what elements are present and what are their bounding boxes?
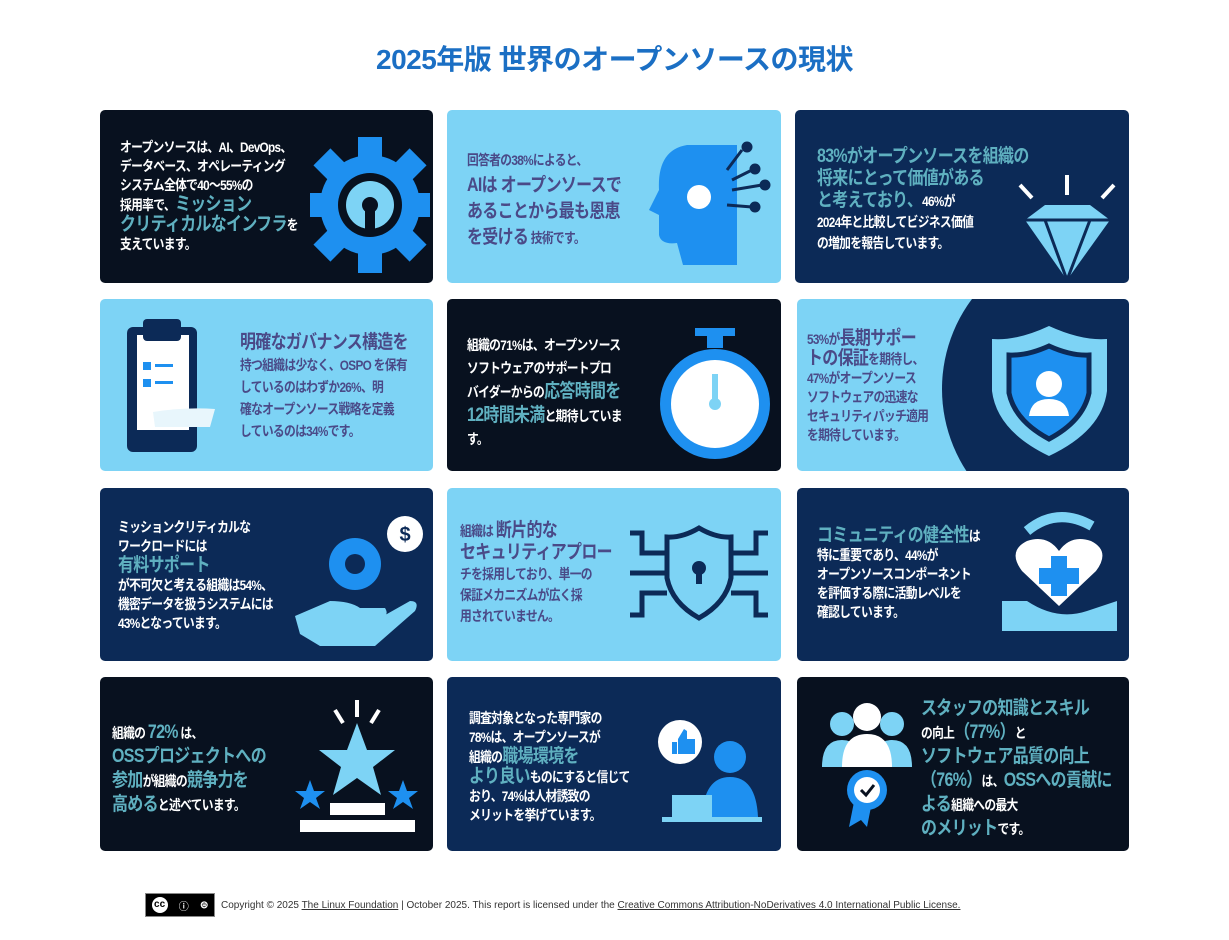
icon: shield (992, 326, 1107, 456)
text block: 組織の71%は、オープンソース (467, 337, 620, 353)
text block (240, 332, 408, 439)
icon: shield circuit (630, 525, 768, 621)
icon: diamond (1018, 175, 1116, 276)
icon: gear (310, 137, 430, 273)
text block: を評価する際に活動レベルを (817, 585, 961, 601)
icon: people with badge (822, 703, 912, 827)
text block: 53%が長期サポー (807, 328, 916, 349)
text block (460, 520, 612, 624)
text block: 特に重要であり、44%が (817, 547, 938, 563)
text block: 参加が組織の競争力を (112, 770, 248, 791)
text block: より良いものにすると信じて (469, 766, 630, 787)
text block: 持つ組織は少なく、OSPO を保有 (240, 357, 407, 373)
text block: クリティカルなインフラを (120, 214, 298, 235)
text block (817, 524, 980, 620)
text block: 機密データを扱うシステムには (118, 596, 273, 612)
text block: データベース、オペレーティング (120, 158, 285, 174)
text block: 将来にとって価値がある (817, 168, 984, 189)
text block: の向上（77%）と (921, 722, 1026, 743)
text block: の増加を報告しています。 (817, 235, 949, 251)
icon: cc license badge: ⊜ (200, 900, 208, 910)
text block: 2024年と比較してビジネス価値 (817, 214, 973, 230)
panel: mission critical infra (100, 110, 433, 283)
text block: 43%となっています。 (118, 615, 226, 631)
text block (467, 152, 621, 248)
icon: cc license badge: ⓘ (179, 902, 189, 912)
panel: fragmented security (447, 488, 781, 661)
text block: のメリットです。 (921, 818, 1030, 839)
text block: 用されていません。 (460, 608, 559, 624)
footer: Copyright © 2025 The Linux Foundation | October 2025. This report is licensed under the Creative Commons Attribution-NoDerivatives 4.0 International Public License. (221, 900, 960, 910)
text block: 組織の 72% は、 (112, 722, 203, 743)
text block: を受ける 技術です。 (467, 227, 585, 248)
icon: gear and hand with dollar (295, 516, 423, 646)
text block (469, 710, 630, 823)
text block: おり、74%は人材誘致の (469, 788, 590, 804)
text block: す。 (467, 431, 488, 447)
text block: 調査対象となった専門家の (469, 710, 602, 726)
panel: governance (100, 299, 433, 471)
panel: response time (447, 299, 781, 471)
panel: long-term support (797, 299, 1129, 471)
panel: competitiveness (100, 677, 433, 851)
text block: オープンソースは、AI、DevOps、 (120, 139, 292, 155)
text block (817, 146, 1029, 251)
text block: と考えており、46%が (817, 190, 955, 211)
icon: star podium (295, 700, 418, 832)
text block: 明確なガバナンス構造を (240, 332, 408, 353)
text block: 78%は、オープンソースが (469, 729, 600, 745)
text block: 83%がオープンソースを組織の (817, 146, 1029, 167)
text block: 12時間未満と期待していま (467, 405, 622, 426)
text block: 確認しています。 (817, 604, 904, 620)
footer (145, 893, 960, 917)
icon: AI head (649, 142, 770, 265)
text block: あることから最も恩恵 (467, 201, 620, 222)
text block: ソフトウェアの迅速な (807, 389, 918, 405)
text block: よる組織への最大 (921, 794, 1018, 815)
panel: community health (797, 488, 1129, 661)
icon: cc license badge (145, 893, 215, 917)
text block: ワークロードには (118, 538, 207, 554)
text block: バイダーからの応答時間を (467, 381, 621, 402)
panel: workplace (447, 677, 781, 851)
text block (112, 722, 266, 815)
text block: 保証メカニズムが広く採 (460, 587, 582, 603)
text block: を期待しています。 (807, 427, 905, 443)
text block: 組織は 断片的な (460, 520, 557, 541)
text block: 回答者の38%によると、 (467, 152, 588, 168)
text block: しているのはわずか26%、明 (240, 379, 383, 395)
icon: person with laptop (658, 720, 762, 822)
navy circle (942, 239, 1229, 539)
title: 2025年版 世界のオープンソースの現状 (376, 44, 853, 75)
text block: セキュリティアプロー (460, 542, 612, 563)
text block: チを採用しており、単一の (460, 566, 592, 582)
text block: 高めると述べています。 (112, 794, 245, 815)
text block: 採用率で、ミッション (120, 194, 251, 215)
text block: スタッフの知識とスキル (921, 698, 1089, 719)
text block: オープンソースコンポーネント (817, 566, 971, 582)
text block: ソフトウェア品質の向上 (921, 746, 1089, 767)
text block: コミュニティの健全性は (817, 525, 980, 546)
text block: （76%）は、OSSへの貢献に (921, 770, 1112, 791)
text block: セキュリティパッチ適用 (807, 408, 928, 424)
text block: 支えています。 (120, 236, 196, 252)
icon: clipboard (127, 319, 215, 452)
text block (807, 328, 928, 443)
text block (921, 698, 1112, 839)
text block (467, 337, 622, 447)
text block: 有料サポート (118, 555, 210, 576)
text block (120, 139, 298, 252)
panel: business value (795, 110, 1129, 283)
text block: トの保証を期待し、 (807, 348, 924, 369)
text block: システム全体で40〜55%の (120, 177, 253, 193)
icon: gear and hand with dollar: $ (399, 524, 411, 546)
text block: 47%がオープンソース (807, 370, 916, 386)
panel: paid support (100, 488, 433, 661)
text block: OSSプロジェクトへの (112, 746, 266, 767)
panel: staff skills (797, 677, 1129, 851)
text block: が不可欠と考える組織は54%、 (118, 577, 272, 593)
icon: heart with hands (1002, 512, 1117, 631)
text block (118, 519, 274, 631)
icon: cc license badge: cc (154, 899, 165, 910)
text block: 確なオープンソース戦略を定義 (240, 401, 394, 417)
text block: メリットを挙げています。 (469, 807, 601, 823)
text block: ソフトウェアのサポートプロ (467, 360, 611, 376)
text block: ミッションクリティカルな (118, 519, 250, 535)
text block: しているのは34%です。 (240, 423, 360, 439)
text block: 組織の職場環境を (469, 746, 579, 767)
panel: AI benefits (447, 110, 781, 283)
icon: stopwatch (660, 328, 770, 459)
text block: AIは オープンソースで (467, 175, 621, 196)
